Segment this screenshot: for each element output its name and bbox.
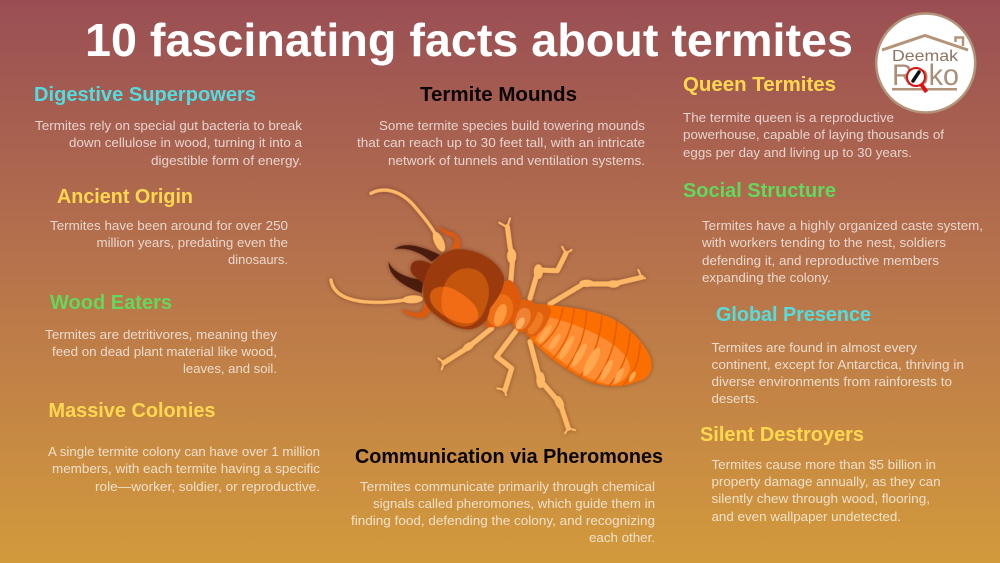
head	[423, 249, 504, 329]
logo word: Roko: Roko	[892, 59, 959, 92]
logo word: Deemak: Deemak	[892, 48, 959, 65]
body text: signals called pheromones, which guide them in	[373, 496, 655, 511]
body text: expanding the colony.	[702, 270, 831, 285]
heading: Wood Eaters	[50, 291, 172, 314]
body text	[45, 327, 278, 376]
body text	[712, 340, 964, 406]
body text: Termites cause more than $5 billion in	[712, 457, 936, 472]
body text: million years, predating even the	[96, 235, 288, 250]
body text: silently chew through wood, flooring,	[712, 491, 930, 506]
heading: Social Structure	[683, 179, 836, 202]
panel: Queen Termites	[683, 73, 944, 160]
icon: house roof	[882, 36, 968, 50]
body text	[351, 479, 655, 545]
body text: down cellulose in wood, turning it into a	[69, 135, 303, 150]
body text: eggs per day and living up to 30 years.	[683, 145, 912, 160]
body text: defending it, and reproductive members	[702, 253, 940, 268]
antennae	[331, 190, 448, 304]
body text	[357, 118, 646, 168]
heading: Silent Destroyers	[700, 423, 864, 446]
body text: powerhouse, capable of laying thousands of	[683, 127, 944, 142]
body text: deserts.	[712, 391, 759, 406]
heading: Ancient Origin	[57, 185, 193, 208]
panel: Communication via Pheromones	[351, 445, 663, 545]
body text: leaves, and soil.	[183, 361, 277, 376]
icon: magnifier	[907, 68, 926, 92]
body text: feed on dead plant material like wood,	[52, 344, 277, 359]
body text: digestible form of energy.	[151, 153, 302, 168]
panel: Wood Eaters	[45, 291, 278, 376]
body text: property damage annually, as they can	[712, 474, 940, 489]
body text: Termites have a highly organized caste system,	[702, 218, 983, 233]
heading: Communication via Pheromones	[355, 445, 663, 468]
panel: Ancient Origin	[50, 185, 288, 267]
body text: Termites have been around for over 250	[50, 218, 288, 233]
heading: Global Presence	[716, 303, 871, 326]
body text: continent, except for Antarctica, thriving in	[712, 357, 964, 372]
heading: Digestive Superpowers	[34, 83, 256, 106]
illustration: termite	[331, 190, 652, 433]
body text	[35, 118, 303, 168]
logo: Deemak Roko	[876, 14, 975, 112]
heading: Massive Colonies	[48, 399, 216, 422]
body text: Termites communicate primarily through chemical	[360, 479, 655, 494]
body text: Termites are detritivores, meaning they	[45, 327, 278, 342]
body text	[50, 218, 288, 267]
panel: Termite Mounds	[357, 83, 646, 168]
body text: members, with each termite having a specific	[52, 461, 321, 476]
body text: Some termite species build towering mounds	[379, 118, 646, 133]
body text	[48, 444, 321, 494]
body text: network of tunnels and ventilation systems.	[388, 153, 645, 168]
title: 10 fascinating facts about termites	[85, 14, 853, 66]
body text: that can reach up to 30 feet tall, with an intricate	[357, 135, 645, 150]
panel: Social Structure	[683, 179, 983, 285]
body text: diverse environments from rainforests to	[712, 374, 952, 389]
body text: dinosaurs.	[228, 252, 288, 267]
thorax segments	[483, 280, 551, 337]
body text: Termites rely on special gut bacteria to break	[35, 118, 303, 133]
body text: A single termite colony can have over 1 million	[48, 444, 320, 459]
body text	[683, 110, 944, 160]
panel: Global Presence	[712, 303, 964, 406]
heading: Termite Mounds	[420, 83, 577, 106]
mandibles	[388, 245, 440, 293]
body text: The termite queen is a reproductive	[683, 110, 894, 125]
body text: each other.	[589, 530, 655, 545]
labrum	[411, 261, 437, 287]
body text: Termites are found in almost every	[712, 340, 918, 355]
body text: with workers tending to the nest, soldiers	[701, 235, 947, 250]
panel: Massive Colonies	[48, 399, 321, 494]
panel: Digestive Superpowers	[34, 83, 303, 168]
legs	[438, 218, 645, 433]
body text	[701, 218, 983, 285]
palps	[402, 227, 460, 318]
body text: role—worker, soldier, or reproductive.	[95, 479, 320, 494]
body text: finding food, defending the colony, and recognizing	[351, 513, 655, 528]
body text: and even wallpaper undetected.	[712, 509, 901, 524]
abdomen	[530, 304, 652, 387]
body text	[712, 457, 940, 524]
panel: Silent Destroyers	[700, 423, 940, 524]
heading: Queen Termites	[683, 73, 836, 96]
